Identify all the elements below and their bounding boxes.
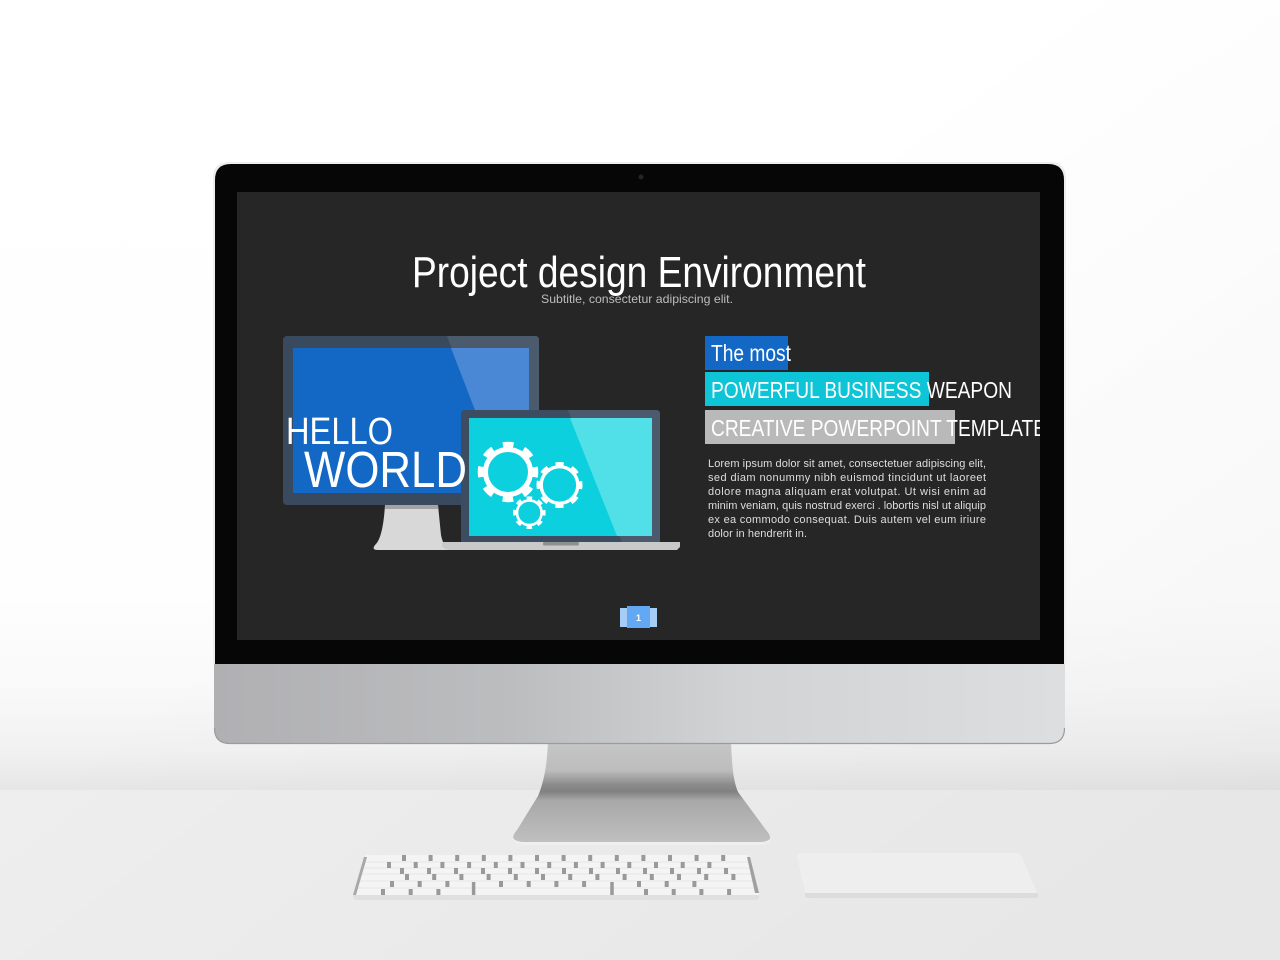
laptop screen (469, 418, 617, 536)
body paragraph: sed diam nonummy nibh euismod tincidunt ut laoreet (708, 472, 986, 484)
highlight bar: teal (705, 372, 929, 406)
keyboard key gaps (381, 858, 737, 895)
body paragraph: minim veniam, quis nostrud exerci . lobortis nisl ut aliquip (708, 500, 986, 512)
badge centre (627, 606, 650, 628)
desktop frame glare (447, 336, 539, 410)
stand base lip (513, 838, 771, 845)
page number: 1 (636, 613, 641, 623)
keyboard left wedge (353, 857, 367, 895)
keyboard body (353, 855, 759, 900)
slide title: Project design Environment (412, 248, 866, 297)
chin lower rim (214, 728, 1064, 744)
keyboard lower lip (353, 895, 759, 900)
monitor outer edge (213, 162, 1066, 664)
monitor silver chin (214, 664, 1065, 744)
desktop screen (293, 348, 475, 493)
slide background (237, 192, 1040, 640)
keyboard key rows (356, 862, 757, 888)
badge side tabs (620, 608, 657, 627)
laptop notch (543, 542, 579, 546)
laptop frame glare (568, 410, 660, 542)
trackpad (797, 853, 1038, 898)
text: HELLO: HELLO (286, 411, 393, 453)
headline: The most: The most (711, 340, 791, 366)
monitor stand (513, 742, 771, 845)
laptop base (442, 542, 680, 550)
highlight bar: blue (705, 336, 788, 370)
headline: POWERFUL BUSINESS WEAPON: POWERFUL BUSINESS WEAPON (711, 377, 1012, 403)
large gear (480, 444, 536, 500)
desk surface (0, 790, 1280, 960)
page number badge (620, 606, 657, 628)
illustration: desktop computer (283, 336, 539, 550)
desktop stand (374, 505, 450, 550)
slide screen (237, 192, 1046, 640)
slide subtitle: Subtitle, consectetur adipiscing elit. (541, 292, 733, 306)
illustration: laptop (442, 410, 680, 550)
trackpad surface (797, 853, 1037, 895)
monitor (213, 162, 1066, 744)
text: WORLD: WORLD (304, 441, 467, 498)
desktop screen glare (451, 348, 529, 410)
body paragraph (708, 458, 986, 540)
headline: CREATIVE POWERPOINT TEMPLATE: CREATIVE POWERPOINT TEMPLATE (711, 415, 1046, 441)
desktop frame (283, 336, 539, 505)
webcam (638, 174, 644, 180)
keyboard right wedge (747, 857, 759, 893)
laptop frame (461, 410, 660, 542)
laptop screen glare (570, 418, 652, 536)
trackpad lip (805, 893, 1038, 898)
desktop stand shadow (385, 505, 438, 509)
medium gear (538, 464, 580, 506)
keyboard (353, 855, 759, 900)
monitor black bezel (215, 164, 1064, 664)
body paragraph: Lorem ipsum dolor sit amet, consectetuer adipiscing elit, (708, 458, 986, 470)
body paragraph: dolor in hendrerit in. (708, 528, 807, 540)
highlight bar: gray (705, 410, 955, 444)
stand body (513, 742, 770, 843)
body paragraph: ex ea commodo consequat. Duis autem vel eum iriure (708, 514, 986, 526)
small gear (514, 498, 544, 528)
body paragraph: dolore magna aliquam erat volutpat. Ut wisi enim ad (708, 486, 986, 498)
